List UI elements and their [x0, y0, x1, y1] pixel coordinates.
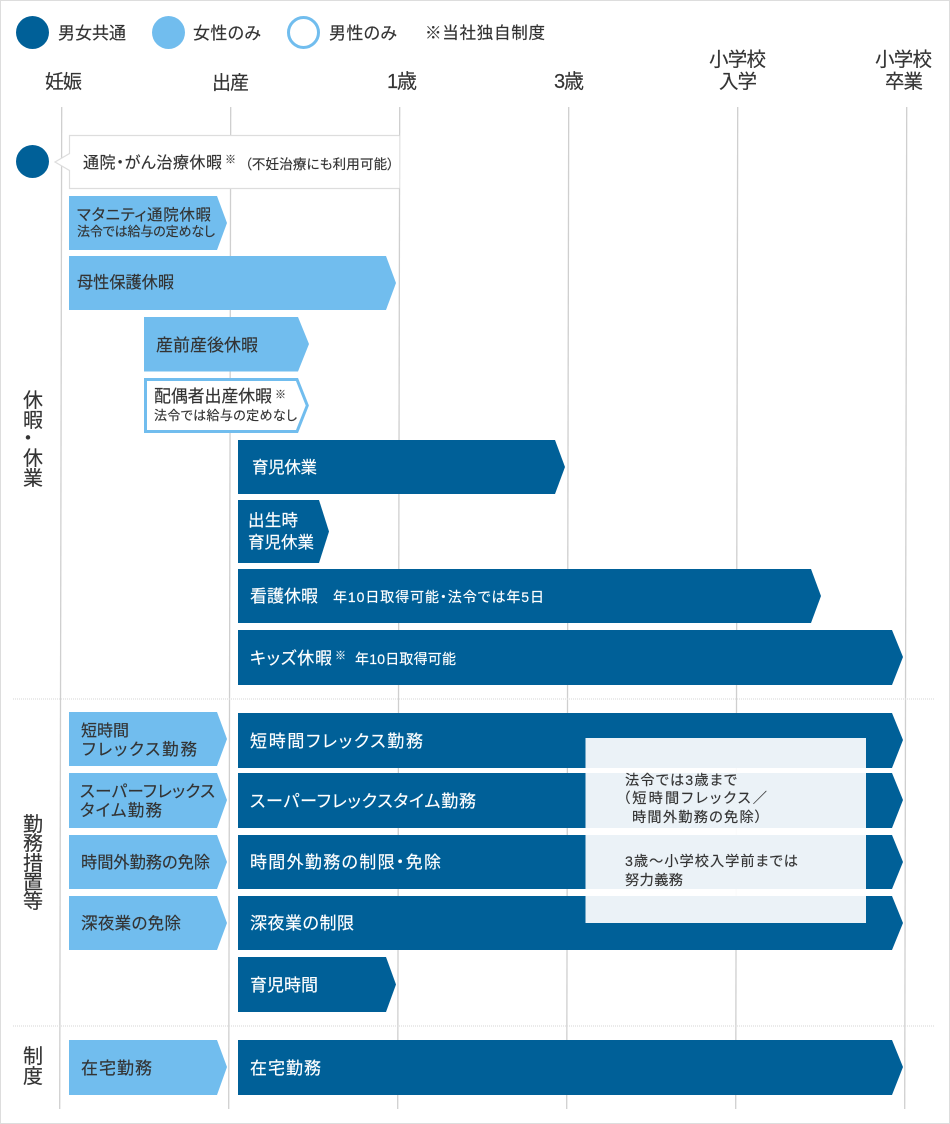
bar: short time flex work — [238, 713, 903, 768]
legend: women only — [152, 16, 261, 49]
note box: legal requirements: 法令では3歳まで — [625, 773, 737, 789]
legend: company original system note: ※当社独自制度 — [425, 24, 545, 42]
section label: leave: ・ — [23, 428, 33, 450]
legend: both genders — [16, 16, 126, 49]
bar: childcare time: 育児時間 — [250, 976, 318, 995]
axis label: elementary school graduation — [875, 49, 932, 93]
legend: men only: 男性のみ — [329, 24, 397, 43]
bar: remote work (women): 在宅勤務 — [81, 1059, 152, 1078]
bar: nursing leave: 年10日取得可能・法令では年5日 — [333, 589, 544, 605]
legend — [16, 16, 545, 49]
timeline axis labels — [45, 49, 932, 94]
bar: short time flex work (women): 短時間 — [81, 722, 129, 740]
callout: hospital visit and cancer treatment leave: ※ — [225, 154, 236, 166]
note box: legal requirements: （短時間フレックス／ — [623, 791, 767, 807]
section label: leave: 休 — [23, 389, 43, 412]
bar: spouse birth leave: ※ — [275, 389, 286, 401]
bar: short time flex work (women) — [69, 712, 227, 766]
bar: late night work exemption (women) — [69, 896, 227, 950]
bar: spouse birth leave — [146, 380, 307, 432]
bar: pre and postnatal leave — [144, 317, 309, 372]
callout: hospital visit and cancer treatment leave: （不妊治療にも利用可能） — [245, 157, 394, 172]
note box: legal requirements: 努力義務 — [625, 872, 683, 889]
bar: kids leave: ※ — [335, 650, 346, 662]
bar: postnatal paternity childcare leave — [238, 500, 329, 563]
bar: childcare leave: 育児休業 — [252, 458, 317, 477]
bar: childcare leave — [238, 440, 565, 494]
bar: overtime exemption (women) — [69, 835, 227, 889]
bar: remote work — [238, 1040, 903, 1095]
bar: maternity hospital leave: 法令では給与の定めなし — [77, 224, 215, 239]
legend: men only — [288, 18, 397, 48]
section label: work measures: 勤 — [23, 813, 43, 836]
section label: leave: 暇 — [23, 410, 43, 432]
timeline grid lines — [60, 107, 907, 1109]
bar: spouse birth leave: 法令では給与の定めなし — [154, 408, 297, 423]
section label: system — [23, 1045, 43, 1088]
section label: leave: 休 — [23, 447, 43, 470]
bar: maternity protection leave — [69, 256, 396, 310]
section label: work measures — [23, 813, 43, 913]
bar: remote work: 在宅勤務 — [250, 1059, 321, 1078]
bar: childcare time — [238, 957, 396, 1012]
bar: super flex time work (women) — [69, 773, 227, 828]
bar: maternity protection leave: 母性保護休暇 — [77, 274, 174, 292]
bar: pre and postnatal leave: 産前産後休暇 — [156, 336, 258, 355]
section label: leave — [23, 389, 43, 490]
bar: kids leave: キッズ休暇 — [250, 649, 332, 668]
bar: super flex time work: スーパーフレックスタイム勤務 — [250, 792, 476, 811]
callout: hospital visit and cancer treatment leave: 通院・がん治療休暇 — [83, 154, 222, 172]
bar: maternity hospital leave: マタニティ通院休暇 — [77, 206, 211, 224]
axis label: elementary school entry: 入学 — [719, 71, 757, 93]
section label: work measures: 務 — [23, 832, 43, 855]
bar: postnatal paternity childcare leave: 育児休業 — [248, 533, 314, 552]
bar: overtime limits and exemption: 時間外勤務の制限・免除 — [250, 853, 441, 872]
section label: work measures: 措 — [23, 852, 43, 875]
bar: kids leave: 年10日取得可能 — [355, 651, 456, 667]
marker: both genders for callout — [16, 145, 49, 178]
bar: short time flex work (women): フレックス勤務 — [82, 740, 198, 759]
section label: system: 制 — [23, 1045, 43, 1068]
bar: short time flex work: 短時間フレックス勤務 — [250, 732, 423, 751]
bar: spouse birth leave: 配偶者出産休暇 — [154, 387, 272, 406]
section label: work measures: 等 — [23, 890, 43, 913]
bar: overtime exemption (women): 時間外勤務の免除 — [81, 854, 210, 872]
axis label: elementary school graduation: 卒業 — [885, 71, 923, 93]
bar: super flex time work (women): タイム勤務 — [80, 801, 162, 820]
bar: super flex time work — [238, 773, 903, 828]
axis label: elementary school graduation: 小学校 — [875, 49, 932, 71]
bar: remote work (women) — [69, 1040, 227, 1095]
bar: super flex time work (women): スーパーフレックス — [80, 782, 215, 801]
bar: late night work exemption (women): 深夜業の免除 — [81, 914, 182, 933]
bar: nursing leave: 看護休暇 — [250, 587, 318, 606]
bar: overtime limits and exemption — [238, 835, 903, 889]
section label: work measures: 置 — [23, 872, 43, 894]
axis label: elementary school entry: 小学校 — [709, 49, 766, 71]
bar: late night work limits — [238, 896, 903, 950]
note box: legal requirements: 3歳～小学校入学前までは — [625, 853, 798, 870]
bar: maternity hospital leave — [69, 196, 227, 250]
axis label: pregnancy: 妊娠 — [45, 71, 82, 93]
axis label: age 1: 1歳 — [387, 70, 417, 93]
bar: nursing leave — [238, 569, 821, 623]
bar: late night work limits: 深夜業の制限 — [250, 914, 354, 933]
note box: legal requirements: 時間外勤務の免除） — [632, 810, 762, 826]
bar: kids leave — [238, 630, 903, 685]
bar: postnatal paternity childcare leave: 出生時 — [248, 511, 298, 530]
section label: leave: 業 — [23, 467, 43, 490]
section label: system: 度 — [23, 1065, 43, 1088]
axis label: age 3: 3歳 — [554, 70, 584, 93]
legend: both genders: 男女共通 — [58, 24, 126, 43]
axis label: elementary school entry — [709, 49, 766, 93]
note box: legal requirements — [586, 738, 866, 923]
legend: women only: 女性のみ — [193, 24, 261, 43]
axis label: birth: 出産 — [212, 72, 249, 94]
callout: hospital visit and cancer treatment leave — [55, 136, 400, 188]
